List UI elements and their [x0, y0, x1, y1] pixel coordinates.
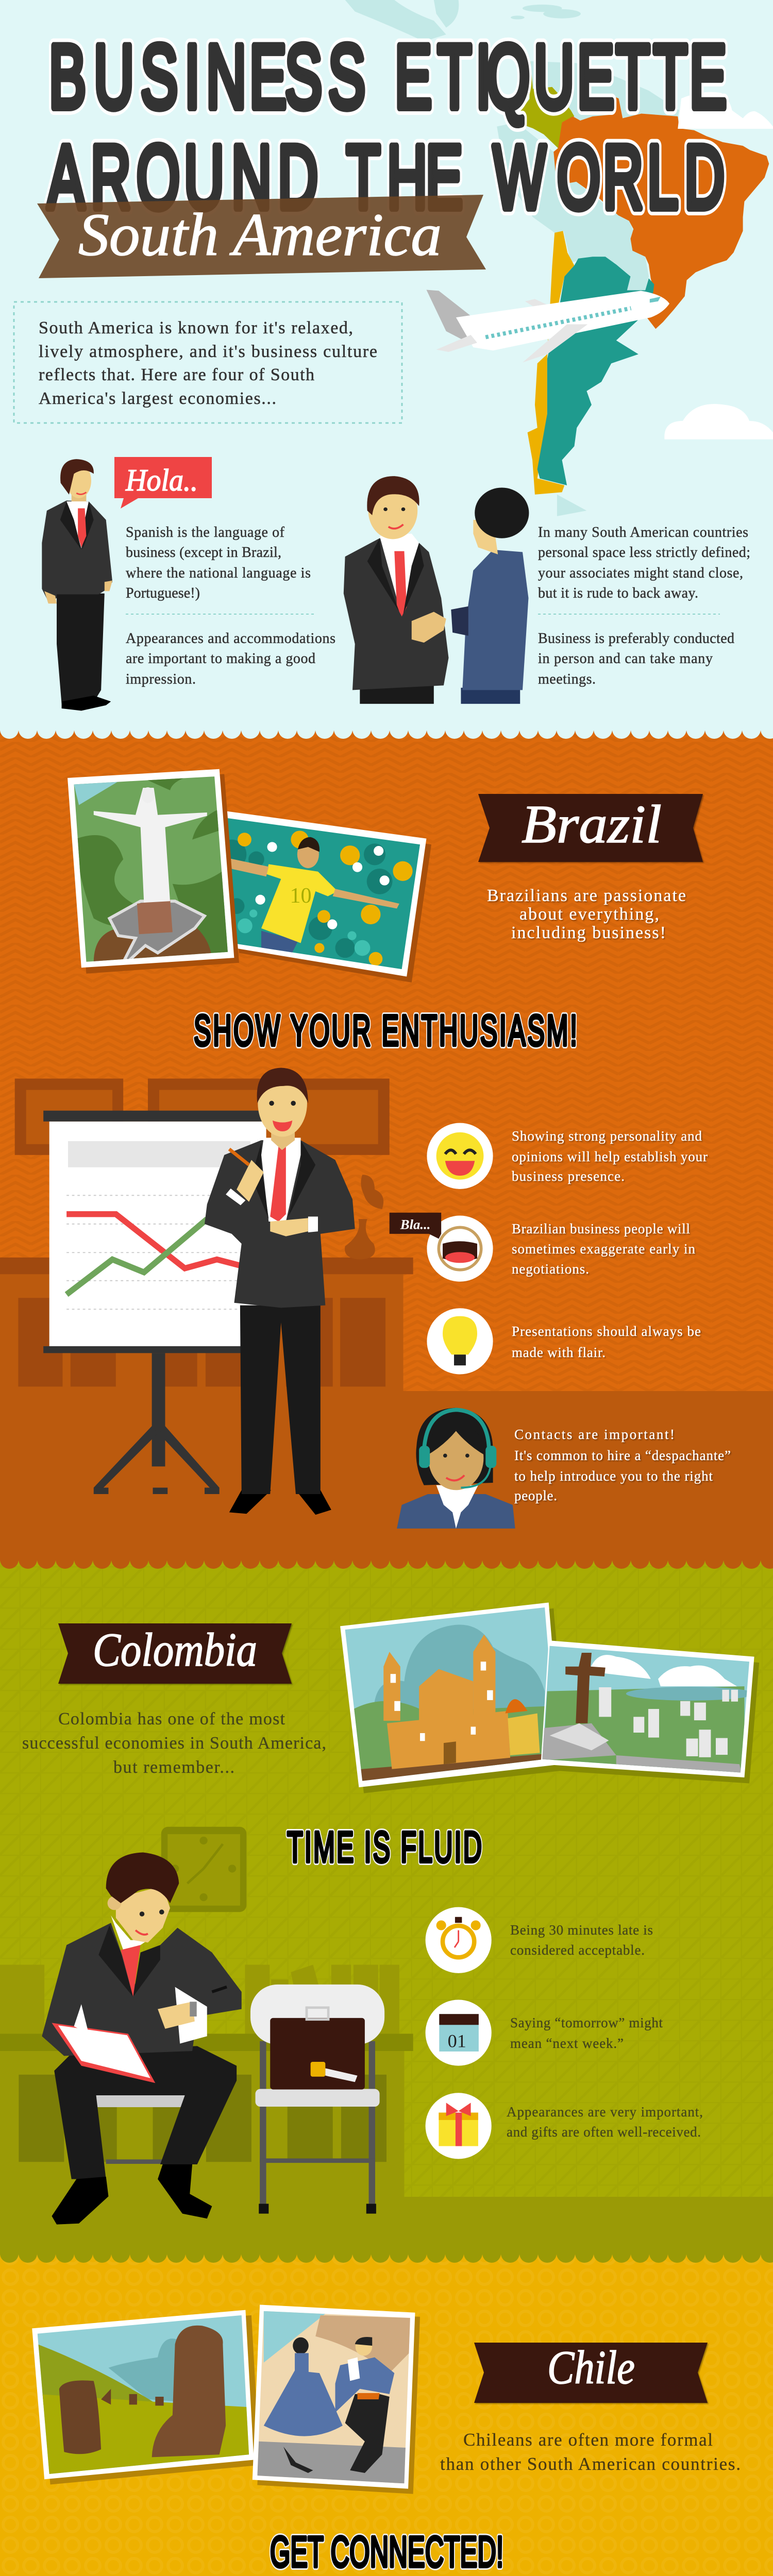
- right intro tips: personal space less strictly defined;: [538, 545, 750, 561]
- intro text box: reflects that. Here are four of South: [39, 365, 314, 384]
- heading: Show your enthusiasm: SHOW YOUR ENTHUSIASM!: [194, 1006, 577, 1055]
- icon circles: Colombia: [426, 1907, 492, 2159]
- photos: Brazil: 10: [290, 884, 312, 908]
- ribbon: Colombia: [58, 1623, 292, 1684]
- title: AROUND THE WORLD: [47, 126, 725, 227]
- icon circles: Brazil: [390, 1123, 493, 1374]
- Colombia tips: considered acceptable.: [510, 1942, 645, 1958]
- ribbon: Brazil: Brazil: [522, 794, 662, 854]
- left intro tips: where the national language is: [126, 565, 311, 581]
- icon: gift: [426, 2093, 492, 2159]
- chair with briefcase: [250, 1985, 384, 2214]
- Colombia tips: Being 30 minutes late is: [510, 1922, 653, 1938]
- right intro tips: your associates might stand close,: [538, 565, 743, 581]
- Brazil tips: negotiations.: [512, 1261, 589, 1277]
- Colombia tips: Saying “tomorrow” might: [510, 2015, 663, 2030]
- Colombia tips: [507, 1922, 703, 2140]
- icon: open mouth: [427, 1215, 493, 1282]
- Brazil subtitle: Brazilians are passionate: [487, 886, 686, 905]
- intro text box: America's largest economies...: [39, 389, 276, 408]
- icon: calendar: [426, 1999, 492, 2066]
- presenter businessman: [205, 1067, 355, 1515]
- photos: Brazil: [68, 769, 431, 982]
- flip chart with line graph: [43, 1111, 266, 1494]
- right intro tips: Business is preferably conducted: [538, 631, 734, 647]
- left intro tips: Portuguese!): [126, 585, 200, 601]
- left intro tips: business (except in Brazil,: [126, 545, 281, 561]
- Colombia subtitle: [22, 1709, 326, 1777]
- contacts text: people.: [514, 1488, 557, 1503]
- Colombia tips: Appearances are very important,: [507, 2104, 703, 2120]
- contacts text: Contacts are important!: [514, 1427, 675, 1442]
- contacts text: It's common to hire a “despachante”: [514, 1448, 731, 1463]
- Brazil subtitle: about everything,: [519, 905, 659, 924]
- ribbon: Colombia: Colombia: [93, 1623, 257, 1676]
- office backdrop: Brazil: [0, 1079, 413, 1393]
- Brazil tips: Showing strong personality and: [512, 1128, 702, 1144]
- seated businessman checking watch: [42, 1852, 242, 2225]
- speech bubble: Bla: [390, 1213, 441, 1239]
- Colombia subtitle: successful economies in South America,: [22, 1734, 326, 1753]
- Brazil tips: made with flair.: [512, 1345, 606, 1360]
- left intro tips: Appearances and accommodations: [126, 631, 335, 647]
- ribbon: South America: [37, 195, 486, 278]
- icon: alarm clock: [426, 1907, 492, 1973]
- Brazil tips: Presentations should always be: [512, 1324, 701, 1339]
- panel: brazil background: [0, 731, 773, 1561]
- title: BUSINESS ETIQUETTE: [49, 26, 727, 127]
- contacts text: [514, 1427, 731, 1503]
- left intro tips: are important to making a good: [126, 651, 315, 667]
- icon: calendar: 01: [448, 2030, 466, 2051]
- Brazil tips: Brazilian business people will: [512, 1221, 690, 1236]
- map of South America: [345, 0, 773, 516]
- Chile subtitle: Chileans are often more formal: [463, 2430, 713, 2450]
- panel: colombia background: [0, 1561, 773, 2255]
- ribbon: South America: South America: [78, 201, 442, 268]
- intro text box: lively atmosphere, and it's business culture: [39, 342, 377, 361]
- Brazil tips: opinions will help establish your: [512, 1149, 708, 1164]
- plane: [426, 290, 669, 363]
- Colombia tips: and gifts are often well-received.: [507, 2124, 701, 2140]
- heading: Time is fluid: TIME IS FLUID: [287, 1823, 482, 1871]
- Brazil tips: sometimes exaggerate early in: [512, 1241, 696, 1257]
- speech bubble: Bla: Bla...: [400, 1216, 431, 1232]
- call centre woman with headset: [397, 1408, 515, 1529]
- heading: Get connected: GET CONNECTED!: [270, 2528, 503, 2576]
- Brazil subtitle: [487, 886, 686, 942]
- Chile subtitle: than other South American countries.: [440, 2454, 741, 2474]
- Brazil tips: business presence.: [512, 1168, 625, 1184]
- title: BUSINESS ETIQUETTE: [49, 26, 727, 127]
- photos: Chile: [32, 2304, 420, 2494]
- ribbon: Brazil: [478, 794, 703, 862]
- right intro tips: In many South American countries: [538, 524, 748, 540]
- businessman standing: [42, 459, 112, 711]
- intro text box: [14, 302, 402, 423]
- speech bubble: Hola: [114, 457, 212, 509]
- intro text box: South America is known for it's relaxed,: [39, 318, 353, 337]
- left intro tips: Spanish is the language of: [126, 524, 285, 540]
- right intro tips: [538, 524, 750, 687]
- Brazil subtitle: including business!: [511, 923, 666, 942]
- right intro tips: but it is rude to back away.: [538, 585, 698, 601]
- right intro tips: meetings.: [538, 671, 596, 687]
- left intro tips: impression.: [126, 671, 196, 687]
- heading: Show your enthusiasm: SHOW YOUR ENTHUSIASM!: [194, 1006, 577, 1055]
- Chile subtitle: [440, 2430, 741, 2474]
- title: AROUND THE WORLD: [47, 126, 725, 227]
- icon: laughing face: [427, 1123, 493, 1189]
- businessmen shaking hands: [344, 476, 529, 704]
- Colombia tips: mean “next week.”: [510, 2036, 624, 2051]
- heading: Time is fluid: TIME IS FLUID: [287, 1823, 482, 1871]
- right intro tips: in person and can take many: [538, 651, 713, 667]
- Colombia subtitle: but remember...: [113, 1758, 234, 1777]
- Colombia subtitle: Colombia has one of the most: [58, 1709, 285, 1728]
- Brazil tips: [512, 1128, 708, 1360]
- heading: Get connected: GET CONNECTED!: [270, 2528, 503, 2576]
- icon: light bulb: [427, 1308, 493, 1374]
- ribbon: Chile: [474, 2341, 708, 2403]
- speech bubble: Hola: Hola..: [125, 463, 198, 497]
- contacts text: to help introduce you to the right: [514, 1468, 713, 1484]
- panel: intro background: [0, 0, 773, 731]
- office backdrop: Colombia: [0, 1827, 413, 2197]
- title: [47, 26, 727, 227]
- ribbon: Chile: Chile: [547, 2341, 635, 2394]
- left intro tips: [126, 524, 335, 687]
- panel: chile background: [0, 2255, 773, 2576]
- photos: Colombia: [340, 1602, 759, 1793]
